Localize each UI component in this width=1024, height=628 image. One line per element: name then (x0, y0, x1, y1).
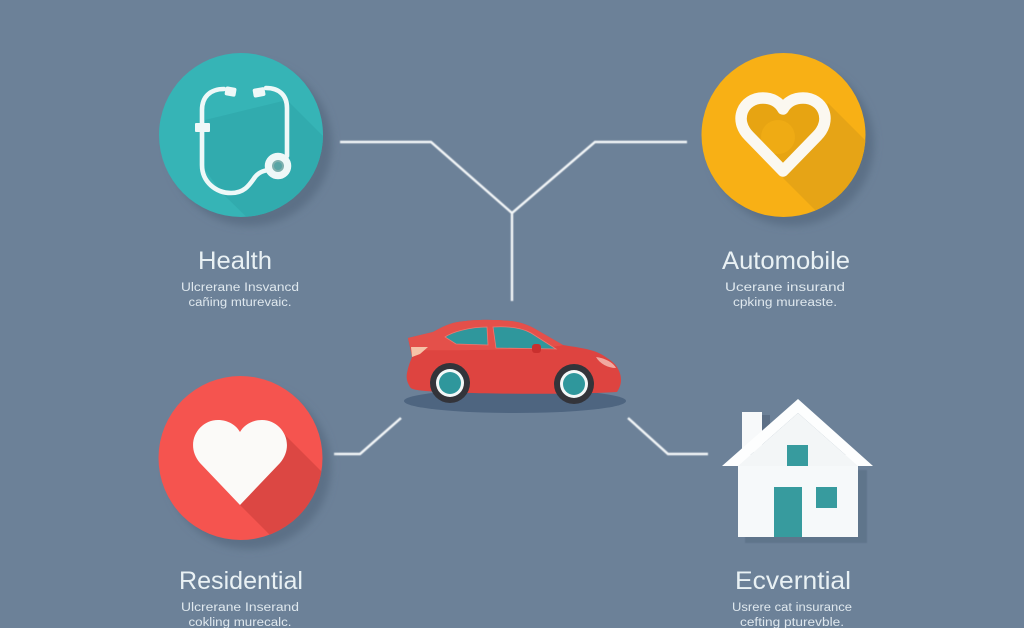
teal circle (159, 53, 323, 217)
roof (722, 399, 873, 466)
car ground shadow (404, 389, 626, 413)
yellow circle (702, 53, 866, 217)
wheel: front (554, 364, 594, 404)
car windows (445, 327, 556, 349)
car body (407, 320, 621, 394)
heading: automobile: Automobile (722, 247, 850, 275)
inner long shadow (240, 435, 322, 534)
panel: health (159, 53, 340, 309)
panel: car (404, 320, 626, 413)
description: health (181, 282, 299, 309)
roof gable (738, 413, 858, 466)
heading: residential: Residential (179, 567, 303, 595)
chimney (742, 412, 762, 452)
heart inner glow (761, 120, 795, 154)
door (774, 487, 802, 537)
chimney shadow (762, 415, 770, 435)
description: house (732, 602, 852, 628)
window: lower (816, 487, 837, 508)
house shadow (745, 470, 867, 543)
circle shadow (167, 385, 331, 549)
description: automobile (725, 282, 845, 309)
house walls (738, 455, 858, 537)
tail light (411, 347, 428, 357)
window: upper (787, 445, 808, 466)
description: house: Usrere cat insurance (732, 602, 852, 614)
icon: heart outline (741, 98, 825, 171)
circle shadow (168, 62, 332, 226)
wheel: rear (430, 363, 470, 403)
icon: heart (193, 420, 287, 505)
description: residential (181, 602, 299, 628)
description: health: cañing mturevaic. (188, 297, 292, 309)
heart fill tint (741, 98, 825, 172)
car upper body (408, 320, 563, 350)
description: residential: Ulcrerane Inserand (181, 602, 299, 614)
description: automobile: cpking mureaste. (733, 297, 837, 309)
description: health: Ulcrerane Insvancd (181, 282, 299, 294)
description: automobile: Ucerane insurand (725, 282, 845, 294)
heading: house: Ecverntial (735, 567, 851, 595)
head light (596, 357, 616, 368)
inner long shadow (205, 101, 323, 217)
connector lines (334, 142, 708, 454)
panel: residential (158, 376, 345, 628)
red circle (158, 376, 322, 540)
inner long shadow (783, 103, 866, 210)
mirror (532, 344, 541, 353)
circle shadow (710, 62, 874, 226)
heading: health: Health (198, 247, 272, 275)
panel: automobile (702, 53, 885, 309)
panel: house (722, 399, 873, 628)
icon: stethoscope (195, 86, 288, 193)
